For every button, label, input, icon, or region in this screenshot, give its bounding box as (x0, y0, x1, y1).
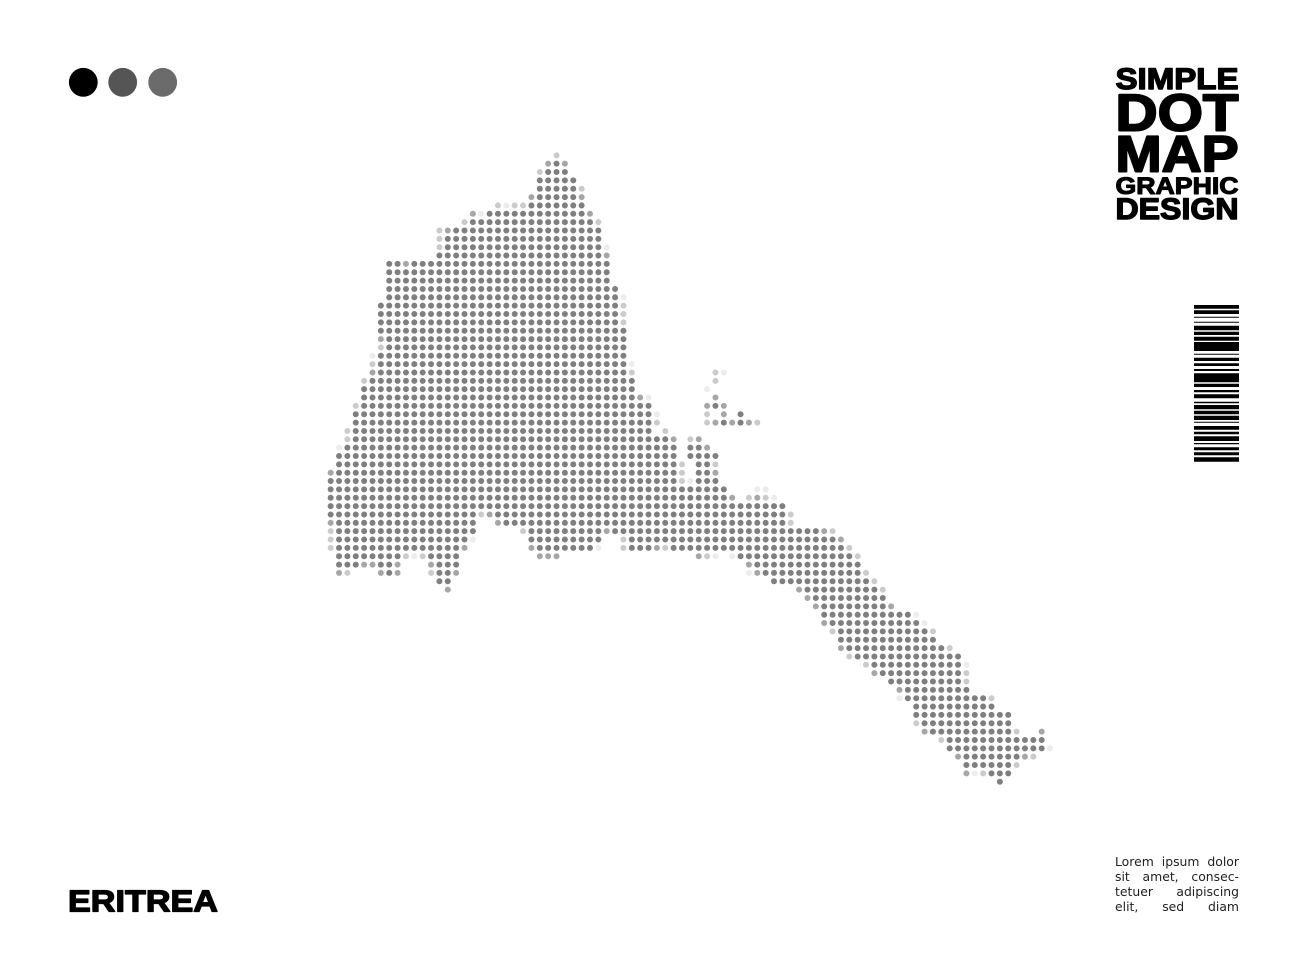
body text: lorem ipsum: elit, sed diam (1115, 899, 1239, 914)
map dots: full tone (331, 164, 1046, 782)
body text: lorem ipsum: tetuer adipiscing (1115, 884, 1239, 899)
map dots: medium tone edge (331, 164, 1046, 773)
body text: lorem ipsum: sit amet, consec- (1115, 869, 1239, 884)
title block: simple dot map graphic design: DESIGN (1116, 193, 1238, 226)
title block: simple dot map graphic design: SIMPLE (1116, 63, 1238, 96)
map dots: light tone edge (331, 155, 1038, 773)
three tone dots (69, 68, 177, 97)
title block: simple dot map graphic design: MAP (1116, 126, 1238, 182)
country name: ERITREA (68, 884, 218, 918)
barcode (1194, 305, 1239, 462)
title block: simple dot map graphic design (1116, 63, 1239, 226)
title block: simple dot map graphic design: GRAPHIC (1116, 173, 1238, 200)
body text: lorem ipsum: Lorem ipsum dolor (1115, 854, 1239, 869)
body text: lorem ipsum (1115, 854, 1239, 914)
title block: simple dot map graphic design: DOT (1116, 84, 1239, 142)
map dots: faint tone edge (339, 205, 1054, 773)
dot map of Eritrea (331, 155, 1054, 782)
